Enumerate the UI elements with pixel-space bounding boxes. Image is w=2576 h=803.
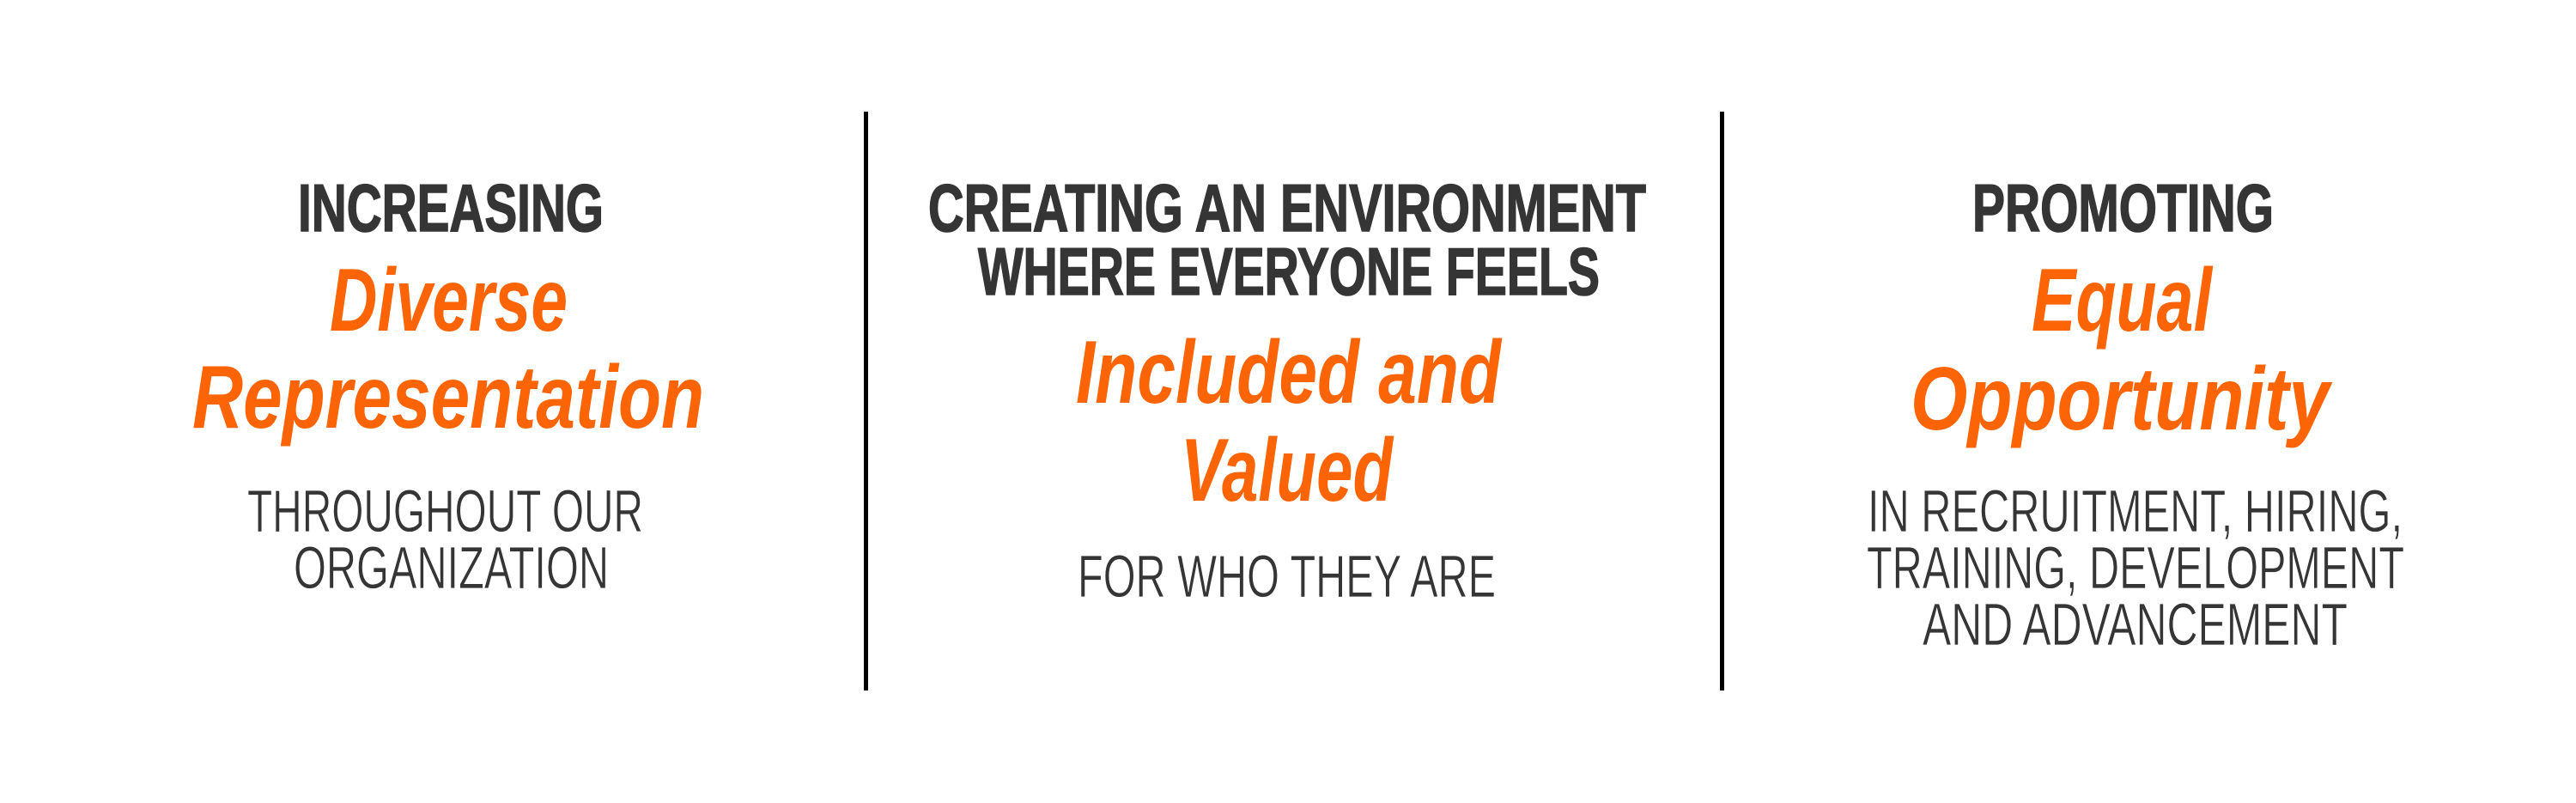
- text block: throughout our organization: ORGANIZATION: [294, 534, 609, 601]
- heading: creating an environment: [928, 170, 1646, 309]
- script heading: included and valued: [1076, 323, 1503, 520]
- text block: recruitment, hiring, training: AND ADVANCEMENT: [1923, 591, 2348, 658]
- script heading: equal opportunity: Equal: [2032, 251, 2214, 350]
- panel: equal opportunity: [1867, 170, 2404, 658]
- heading: promoting: PROMOTING: [1972, 170, 2274, 246]
- panel: diverse representation: [192, 170, 704, 601]
- text block: throughout our organization: [247, 478, 643, 601]
- script heading: diverse representation: Diverse: [330, 251, 568, 350]
- script heading: equal opportunity: [1911, 251, 2333, 449]
- text block: for who they are: FOR WHO THEY ARE: [1078, 543, 1496, 610]
- heading: creating an environment: WHERE EVERYONE FEELS: [978, 234, 1600, 309]
- script heading: included and valued: Valued: [1181, 421, 1394, 520]
- script heading: diverse representation: [192, 251, 704, 447]
- script heading: diverse representation: Representation: [192, 348, 704, 447]
- script heading: included and valued: Included and: [1076, 323, 1503, 423]
- panel: included and valued: [928, 170, 1646, 610]
- heading: increasing: INCREASING: [298, 170, 604, 246]
- script heading: equal opportunity: Opportunity: [1911, 350, 2333, 449]
- text block: throughout our organization: THROUGHOUT OUR: [247, 478, 643, 544]
- heading: creating an environment: CREATING AN ENVIRONMENT: [928, 170, 1646, 246]
- text block: recruitment, hiring, training: [1867, 478, 2404, 658]
